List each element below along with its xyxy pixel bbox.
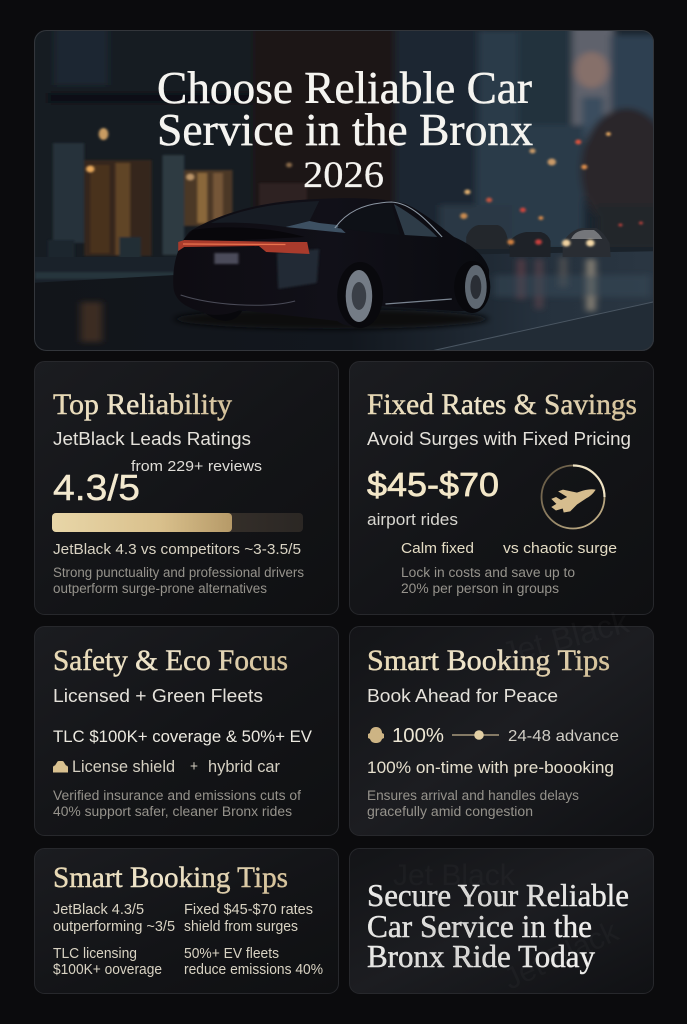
description: Ensures arrival and handles delays: [367, 788, 579, 803]
tip: licensing: [53, 945, 162, 978]
icon: gold car: [53, 761, 68, 772]
description: gracefully amid congestion: [367, 804, 533, 819]
price: $45-$70: [367, 466, 499, 503]
description: Strong punctuality and professional drivers: [53, 565, 304, 580]
panel: summary tips: [34, 848, 338, 994]
tip: rating: [53, 901, 175, 935]
street lights: [86, 128, 643, 226]
title: Service in the Bronx: [157, 104, 533, 155]
tip: licensing: TLC licensing: [53, 945, 137, 962]
watermarks: Jet Black: [393, 859, 516, 892]
heading: booking tips: Smart Booking Tips: [367, 644, 610, 677]
heading: fixed rates: Fixed Rates & Savings: [367, 388, 637, 421]
title: 2026: [303, 155, 384, 196]
wheels: [337, 262, 383, 328]
description: [53, 788, 301, 819]
tip: EV fleets: 50%+ EV fleets: [184, 945, 279, 962]
rating progress bar: [52, 513, 303, 532]
tip: rating: JetBlack 4.3/5: [53, 901, 144, 918]
on-time line: 100% on-time with pre-boooking: [367, 758, 614, 777]
comparison labels: [401, 540, 617, 557]
comparison labels: Calm fixed: [401, 540, 474, 557]
storefront windows: [48, 142, 307, 257]
icon labels: License shield: [72, 758, 175, 776]
watermarks: Jet Black: [499, 915, 624, 996]
subheading: ratings: JetBlack Leads Ratings: [53, 429, 251, 449]
panel: call to action: [350, 848, 654, 996]
advance label: 24-48 advance: [508, 728, 619, 745]
heading: top reliability: Top Reliability: [53, 388, 232, 421]
watermark: Jet Black: [497, 603, 633, 672]
price caption: airport rides: [367, 511, 458, 529]
icon labels: hybrid car: [208, 758, 280, 776]
icon: gold badge: [368, 727, 384, 743]
call to action text: Secure Your Reliable: [367, 877, 629, 913]
subheading: book ahead: Book Ahead for Peace: [367, 686, 558, 706]
tip: EV fleets: reduce emissions 40%: [184, 961, 323, 978]
description: Lock in costs and save up to: [401, 565, 575, 580]
description: Verified insurance and emissions cuts of: [53, 788, 301, 803]
on-time stat: 100%: [392, 725, 444, 747]
icon labels: [72, 758, 280, 776]
distant cars: [466, 225, 611, 257]
tip: EV fleets: [184, 945, 323, 978]
timeline slider: [452, 730, 499, 740]
rating number: 4.3/5: [53, 467, 140, 508]
car: [173, 198, 490, 329]
description: [53, 565, 304, 596]
call to action text: Car Service in the: [367, 908, 592, 944]
comparison line: JetBlack 4.3 vs competitors ~3-3.5/5: [53, 541, 301, 558]
tip: fixed rates: [184, 901, 313, 935]
description: [367, 788, 579, 819]
tip: fixed rates: shield from surges: [184, 918, 298, 935]
watermarks: [393, 859, 624, 996]
sidewalk and road: [46, 247, 562, 272]
panel: top reliability: [34, 362, 338, 614]
icon labels: +: [190, 758, 198, 775]
coverage stat: TLC $100K+ coverage & 50%+ EV: [53, 727, 313, 746]
title: Choose Reliable Car: [157, 62, 532, 113]
icon: plane in ring: [542, 466, 604, 528]
heading: summary: Smart Booking Tips: [53, 861, 288, 894]
description: 20% per person in groups: [401, 581, 559, 596]
panel: safety and eco focus: [34, 626, 338, 836]
subheading: fixed pricing: Avoid Surges with Fixed Pricing: [367, 429, 631, 449]
tip: licensing: $100K+ ooverage: [53, 961, 162, 978]
comparison labels: vs chaotic surge: [503, 540, 617, 557]
tip: rating: outperforming ~3/5: [53, 918, 175, 935]
panel: smart booking tips: [350, 603, 654, 836]
description: outperform surge-prone alternatives: [53, 581, 267, 596]
description: [401, 565, 575, 596]
panel: fixed rates and savings: [350, 362, 654, 614]
call to action text: [367, 877, 629, 974]
title: [157, 62, 533, 196]
panel: hero photo of car on wet Bronx street: [30, 25, 672, 355]
call to action text: Bronx Ride Today: [367, 938, 595, 974]
tip: fixed rates: Fixed $45-$70 rates: [184, 901, 313, 918]
description: 40% support safer, cleaner Bronx rides: [53, 804, 292, 819]
review count: from 229+ reviews: [131, 458, 262, 475]
heading: safety: Safety & Eco Focus: [53, 644, 288, 677]
subheading: fleets: Licensed + Green Fleets: [53, 686, 263, 706]
